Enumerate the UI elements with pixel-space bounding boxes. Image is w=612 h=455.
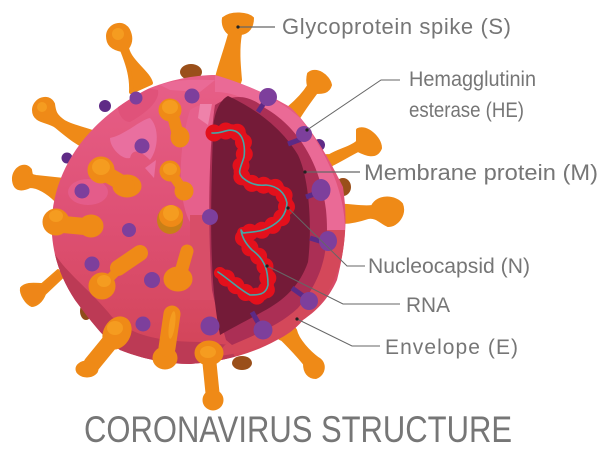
- spike lower left thin: [21, 270, 63, 306]
- outer spikes behind body: [14, 13, 403, 378]
- spike J: [195, 341, 223, 410]
- spike I: [76, 312, 137, 377]
- label: RNA: RNA: [406, 294, 450, 317]
- spike right: [329, 198, 403, 226]
- stems: [252, 100, 326, 326]
- RNA with nucleocapsid: [212, 130, 287, 296]
- spike B: [159, 99, 189, 147]
- spike H: [153, 314, 177, 369]
- purple membrane proteins on body: [74, 88, 337, 340]
- highlight layer: [37, 28, 216, 358]
- spike top centre: [215, 13, 253, 92]
- title: CORONAVIRUS STRUCTURE: [84, 409, 512, 450]
- spike top left: [108, 25, 151, 92]
- rim highlight right: [215, 75, 345, 230]
- spike right upper: [310, 129, 380, 170]
- spike left: [14, 167, 64, 200]
- lighter patches: [110, 118, 157, 160]
- label: hemagglutinin esterase: Hemagglutinin: [409, 68, 536, 91]
- virus body: [50, 75, 345, 370]
- label: esterase: esterase (HE): [409, 99, 524, 122]
- leader dots: [236, 25, 309, 321]
- orange spikes on body: [43, 99, 223, 410]
- cross section: [209, 96, 327, 345]
- spike C: [160, 161, 193, 200]
- spike D: [43, 209, 103, 237]
- label: nucleocapsid: Nucleocapsid (N): [368, 255, 530, 278]
- membrane layer: [209, 97, 327, 345]
- spike A: [88, 157, 141, 197]
- inner dark: [211, 96, 310, 335]
- label: envelope: Envelope (E): [385, 336, 518, 359]
- label: glycoprotein spike: Glycoprotein spike (S): [282, 14, 511, 39]
- back bumps: [62, 64, 351, 370]
- spike top right: [289, 72, 330, 118]
- spike F: [89, 253, 140, 299]
- spike G: [164, 251, 192, 291]
- spike bottom right: [273, 323, 324, 378]
- label: membrane protein: Membrane protein (M): [364, 160, 598, 185]
- spike E: [157, 205, 183, 234]
- spike left upper: [34, 99, 102, 149]
- lower dark band: [54, 254, 235, 364]
- leader lines: [238, 27, 400, 346]
